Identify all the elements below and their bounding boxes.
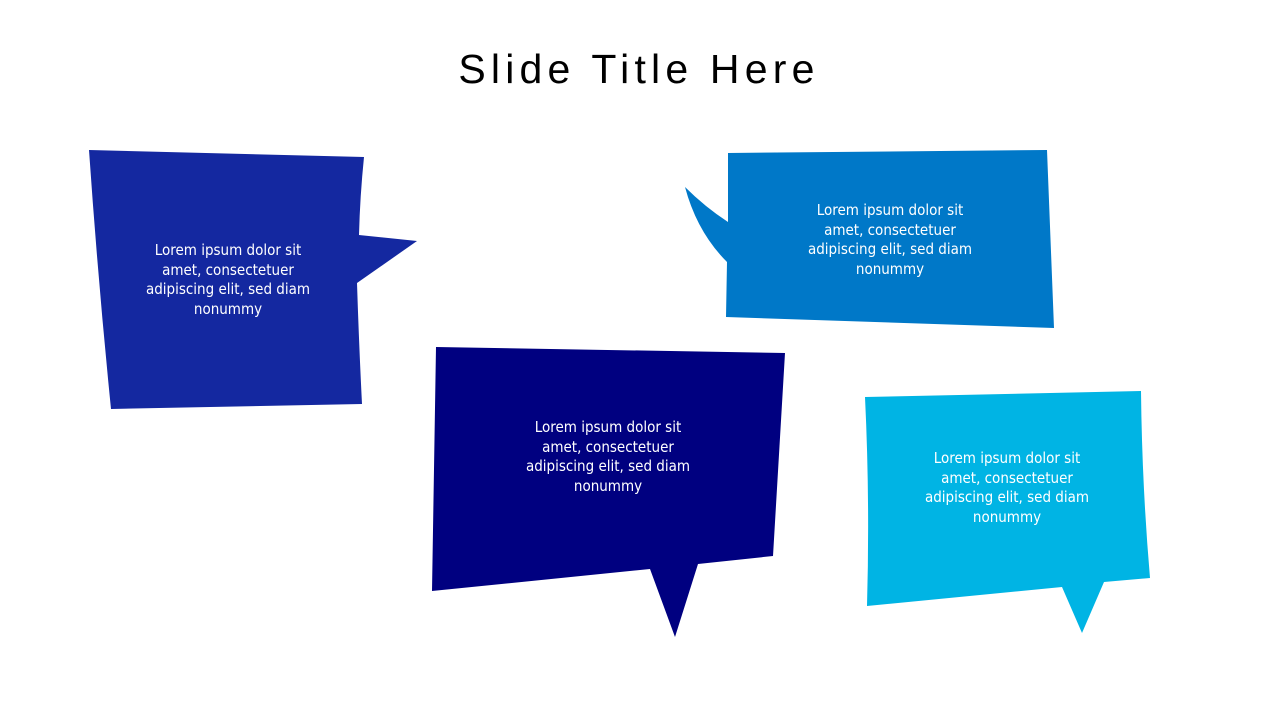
text: top-left callout: adipiscing elit, sed diam	[146, 280, 310, 298]
text: top-right callout: amet, consectetuer	[824, 220, 956, 238]
title: Slide Title Here	[458, 46, 820, 92]
callout: top-right	[685, 150, 1054, 328]
text: top-left callout: nonummy	[194, 300, 262, 318]
text: top-left callout	[146, 241, 310, 318]
callout: middle	[432, 347, 785, 637]
text: middle callout: adipiscing elit, sed diam	[526, 457, 690, 475]
text: top-left callout: amet, consectetuer	[162, 260, 294, 278]
text: middle callout: Lorem ipsum dolor sit	[535, 418, 681, 436]
callout: top-left	[89, 150, 417, 409]
text: bottom-right callout: adipiscing elit, sed diam	[925, 488, 1089, 506]
text: top-right callout: nonummy	[856, 260, 924, 278]
callout: bottom-right	[865, 391, 1150, 633]
text: top-right callout: adipiscing elit, sed diam	[808, 240, 972, 258]
text: bottom-right callout: Lorem ipsum dolor sit	[934, 449, 1080, 467]
text: bottom-right callout: amet, consectetuer	[941, 468, 1073, 486]
text: middle callout	[526, 418, 690, 494]
text: top-right callout: Lorem ipsum dolor sit	[817, 201, 963, 219]
text: middle callout: nonummy	[574, 476, 642, 494]
text: top-left callout: Lorem ipsum dolor sit	[155, 241, 301, 259]
text: bottom-right callout	[925, 449, 1089, 526]
text: bottom-right callout: nonummy	[973, 508, 1041, 526]
text: middle callout: amet, consectetuer	[542, 438, 674, 456]
text: top-right callout	[808, 201, 972, 278]
